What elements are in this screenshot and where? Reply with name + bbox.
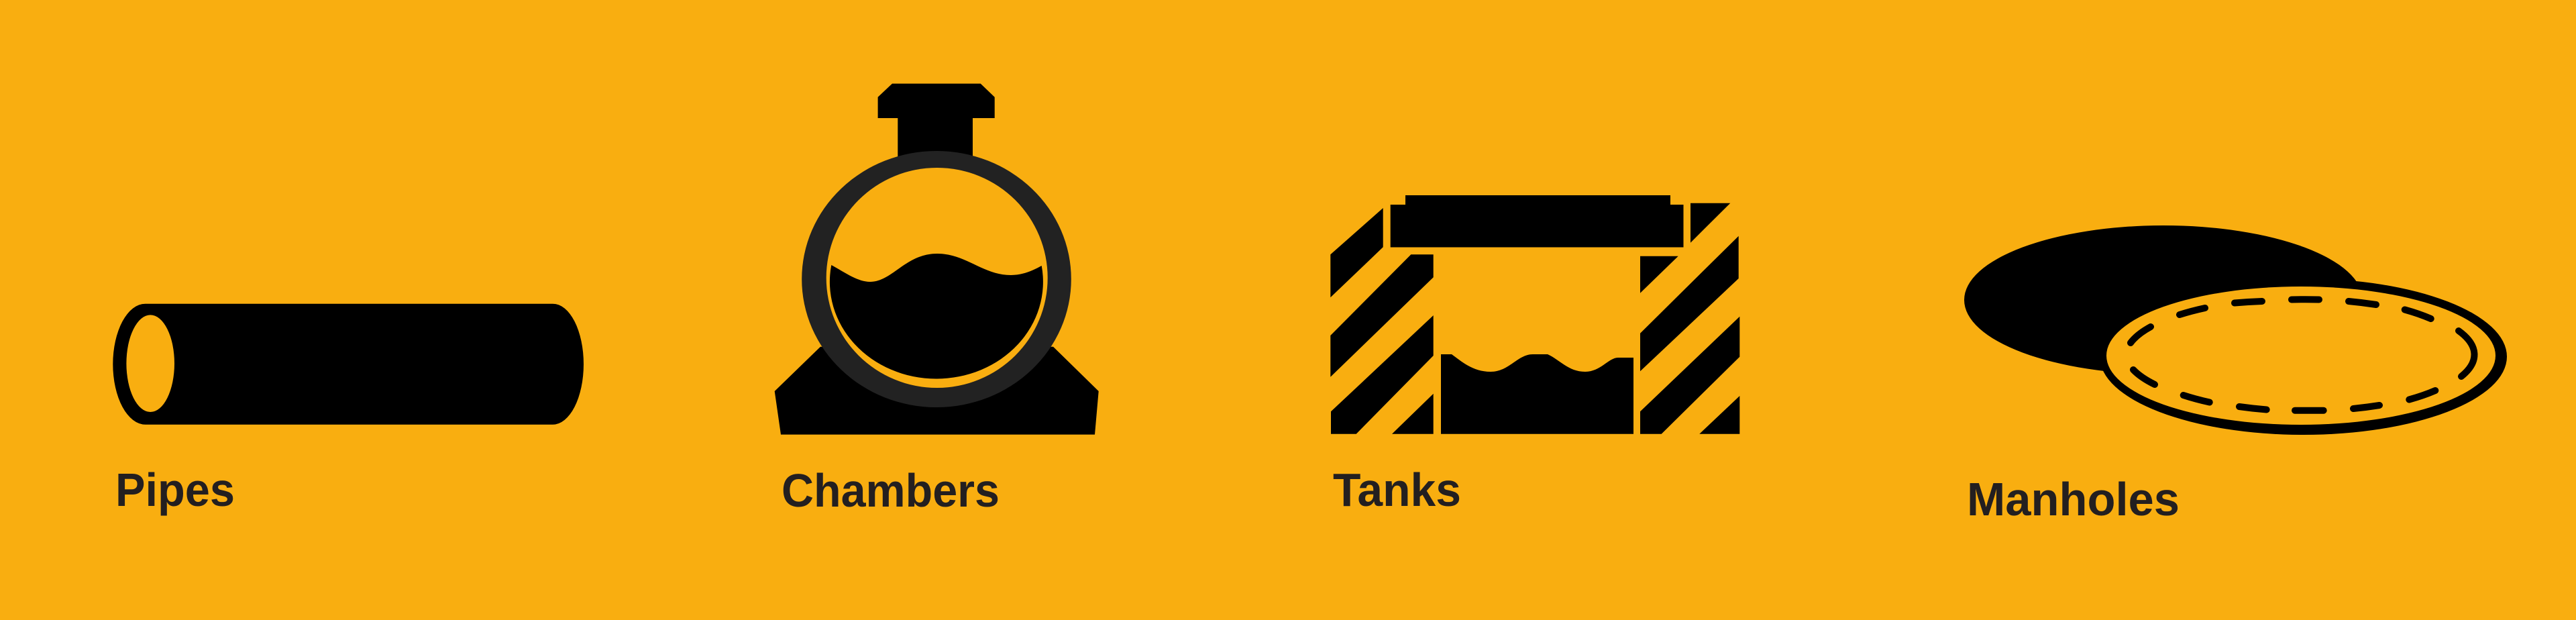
panel: manholes <box>1964 225 2507 525</box>
icon: tank <box>1330 195 1739 434</box>
label: Manholes: Manholes <box>1967 473 2180 525</box>
icon: manhole <box>1964 225 2507 435</box>
label: Chambers: Chambers <box>782 464 1000 517</box>
panel: tanks <box>1330 195 1739 516</box>
label: Tanks: Tanks <box>1333 464 1461 516</box>
label: Pipes: Pipes <box>115 464 235 516</box>
panel: pipes <box>113 304 584 516</box>
icon: pipe <box>113 304 584 425</box>
panel: chambers <box>775 84 1099 517</box>
icon: chamber <box>775 84 1099 435</box>
